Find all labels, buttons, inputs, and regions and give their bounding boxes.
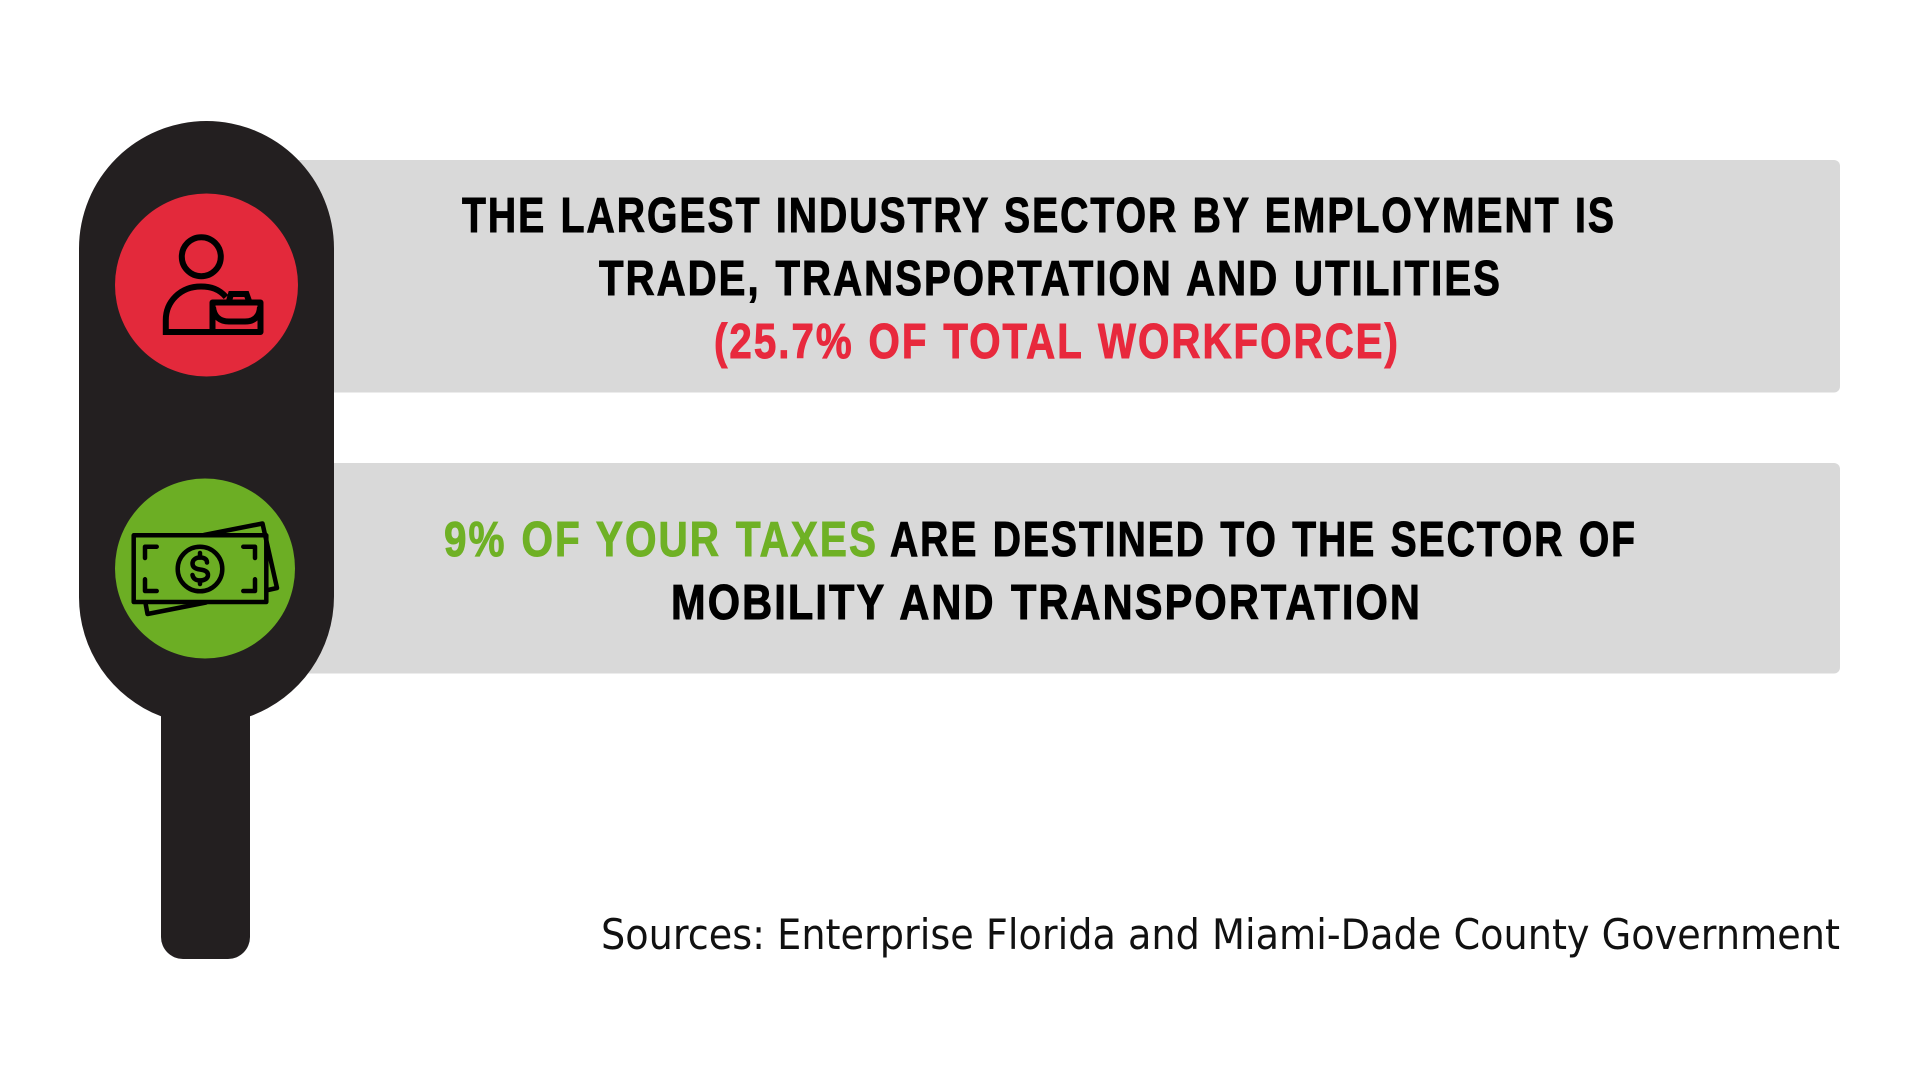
panel: largest industry sector bbox=[290, 160, 1840, 392]
traffic light bbox=[79, 121, 334, 959]
text: heading line 1: THE LARGEST INDUSTRY SECTOR BY EMPLOYMENT IS bbox=[462, 188, 1616, 243]
text: heading line 1 remainder: ARE DESTINED TO THE SECTOR OF bbox=[890, 512, 1637, 567]
green light bbox=[115, 478, 295, 658]
panel: taxes bbox=[290, 463, 1840, 674]
text: green highlighted statistic: 9% OF YOUR TAXES bbox=[444, 512, 878, 567]
panel background bbox=[290, 463, 1840, 674]
panel background bbox=[290, 160, 1840, 392]
red light bbox=[115, 194, 298, 376]
text: red highlighted statistic: (25.7% OF TOTAL WORKFORCE) bbox=[714, 314, 1400, 369]
traffic light housing and pole bbox=[79, 121, 334, 959]
text: sources: Sources: Enterprise Florida and Miami-Dade County Government bbox=[601, 910, 1840, 959]
icon: banknotes with dollar sign bbox=[134, 524, 277, 614]
text: heading line 2: TRADE, TRANSPORTATION AND UTILITIES bbox=[599, 251, 1502, 306]
text: heading line 2: MOBILITY AND TRANSPORTATION bbox=[671, 575, 1422, 630]
icon: worker with briefcase bbox=[166, 237, 260, 332]
